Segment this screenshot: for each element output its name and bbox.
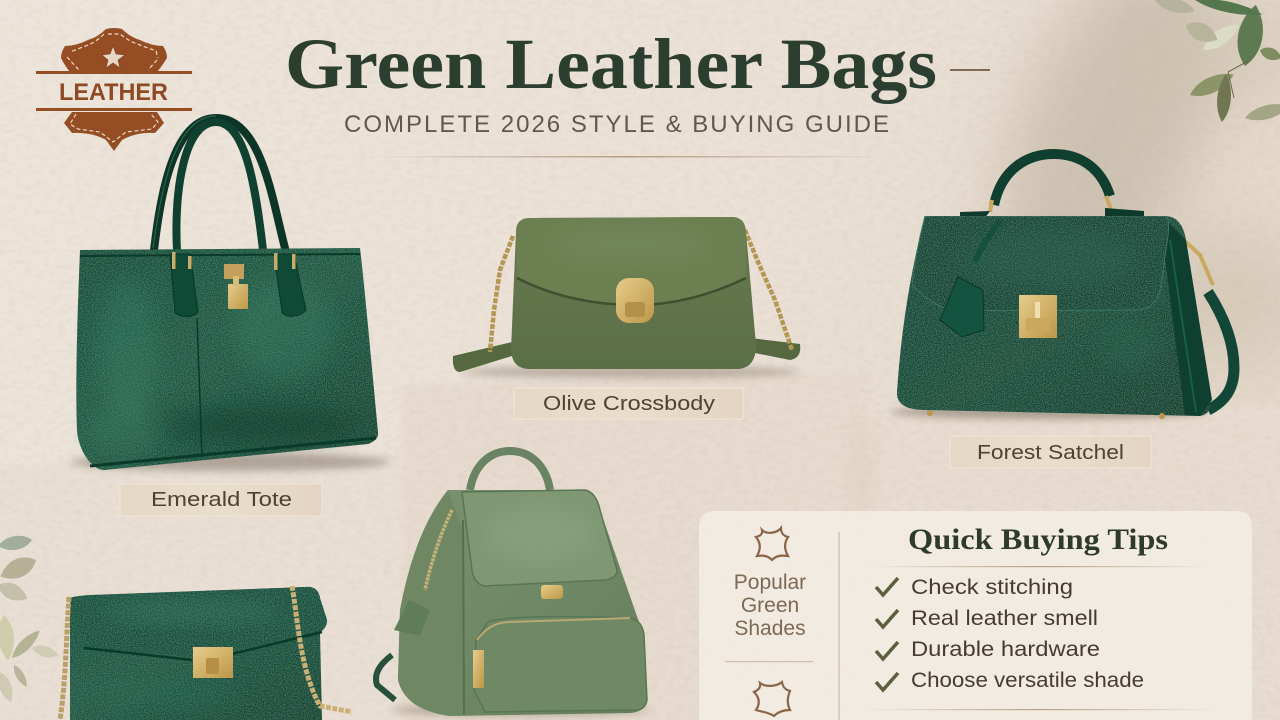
clasp [1019,295,1057,338]
bag: forest satchel [890,154,1234,419]
label: olive crossbody [514,388,743,419]
back handle [154,118,286,252]
bag: sage backpack [376,451,650,716]
label: emerald tote [120,484,322,516]
leaves: bottom left [0,533,60,704]
heading rule [360,156,890,158]
bag: emerald tote [70,116,390,471]
title dash [950,69,990,71]
bag: olive crossbody [453,217,800,378]
turn lock [616,278,654,323]
tips heading: Quick Buying Tips [908,523,1168,556]
side panel [398,490,463,714]
chain [60,597,69,720]
icon: leather hide [756,528,788,560]
hanging tag [975,220,1000,262]
chains [490,236,513,352]
tip: real leather smell: Real leather smell [911,606,1098,630]
tip: choose versatile shade: Choose versatile shade [911,668,1144,692]
flap [462,490,617,586]
side strap [376,655,395,700]
feet [927,410,933,416]
icon: leather hide 2 [754,682,790,716]
star [102,46,125,68]
bag: green clutch [60,586,352,720]
subtitle: COMPLETE 2026 STYLE & BUYING GUIDE [344,111,889,138]
popular green shades: Shades [734,617,806,640]
body [398,490,647,716]
body [897,216,1210,416]
shoulder strap [1208,292,1234,410]
main zipper [425,510,452,590]
key fob [394,600,430,636]
leaves: top right [1153,0,1280,125]
clasp [193,647,233,678]
tip: check stitching: Check stitching [911,575,1073,599]
carry handle [470,451,550,490]
tip: durable hardware: Durable hardware [911,637,1100,661]
front handle [176,122,263,252]
plinths [0,452,405,720]
panel: quick buying tips [699,511,1252,720]
badge word: LEATHER [59,79,168,106]
popular green shades: Popular [734,571,806,594]
popular green shades: Green [741,594,799,617]
label: olive crossbody: Olive Crossbody [543,393,715,415]
zip pull [473,650,484,688]
pocket [474,617,647,712]
leather badge logo [36,28,192,151]
padlock [224,264,244,279]
label: forest satchel: Forest Satchel [977,442,1124,464]
clasp [541,585,563,599]
label: emerald tote: Emerald Tote [151,489,292,511]
title: Green Leather Bags [285,24,937,104]
label: forest satchel [950,436,1151,468]
handle tabs [170,254,198,316]
top handle [994,154,1110,205]
straps [453,342,512,372]
flap [912,216,1169,311]
